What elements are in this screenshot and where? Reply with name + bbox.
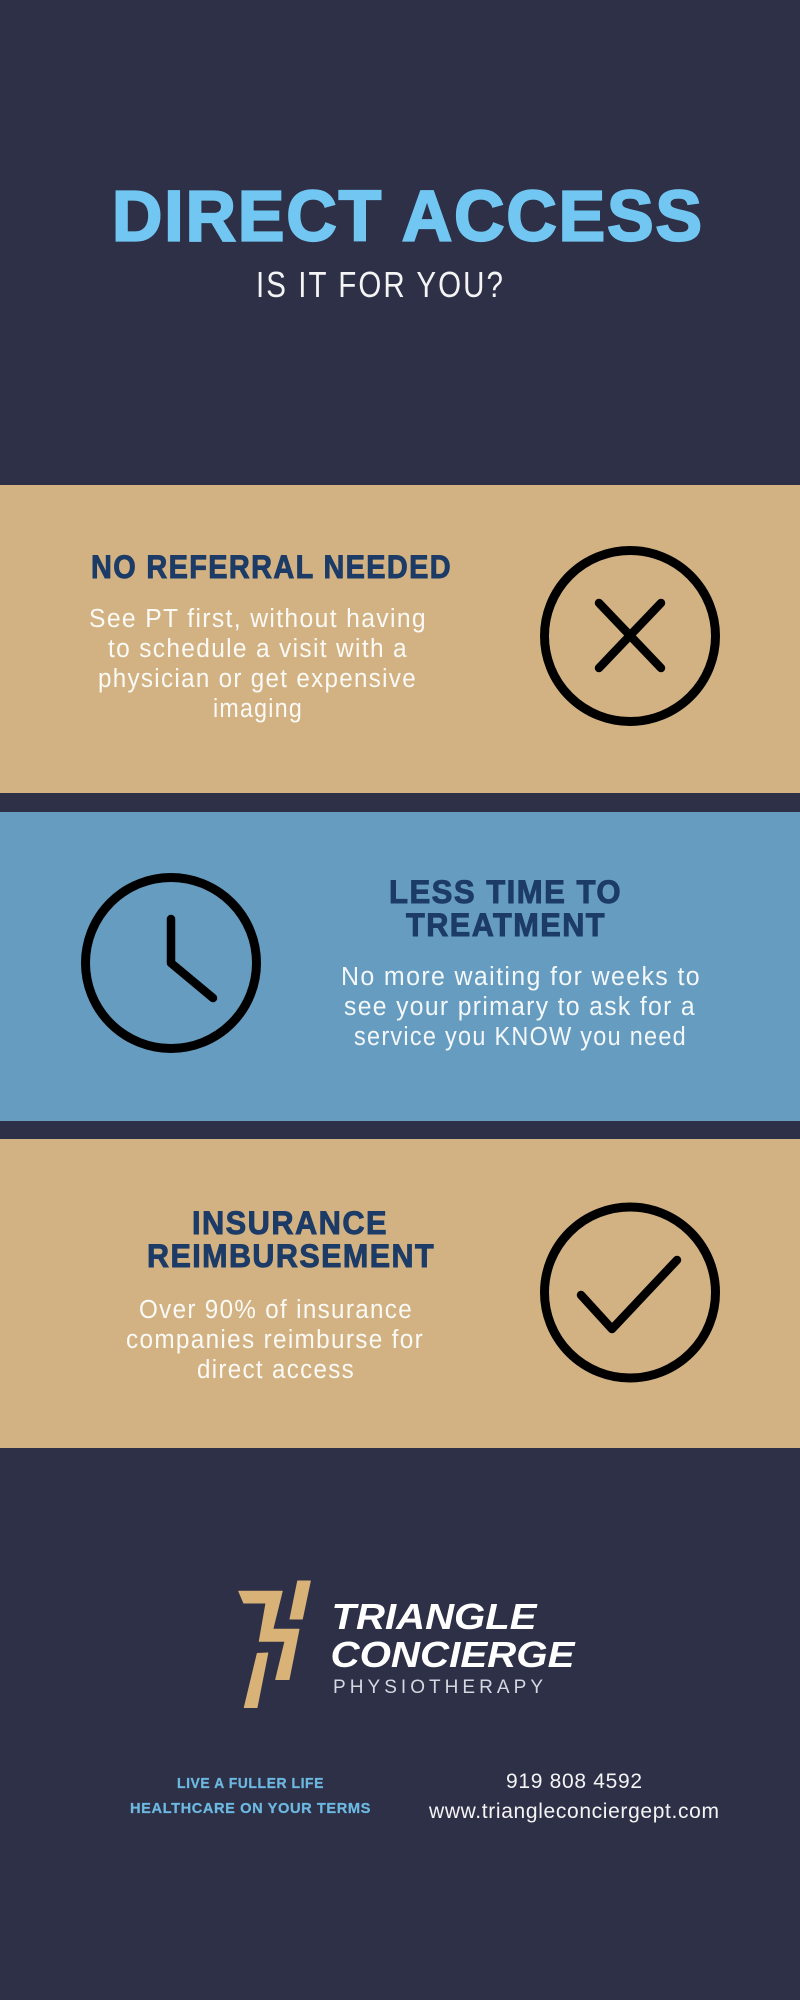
heading: insurance reimbursement: INSURANCE	[192, 1205, 388, 1241]
subtitle: IS IT FOR YOU?	[256, 264, 505, 305]
heading: insurance reimbursement	[147, 1205, 435, 1274]
panel: no referral needed	[0, 485, 800, 793]
text block: less time description: service you KNOW you need	[354, 1023, 687, 1051]
title: DIRECT ACCESS	[112, 178, 704, 256]
slogan: HEALTHCARE ON YOUR TERMS	[130, 1800, 371, 1817]
logo wordmark	[330, 1596, 576, 1675]
heading: less time to treatment: TREATMENT	[406, 907, 606, 943]
slogan: LIVE A FULLER LIFE	[177, 1775, 324, 1792]
panel background blue	[0, 812, 800, 1121]
panel: less time to treatment	[0, 812, 800, 1121]
text block: no referral description	[89, 605, 427, 723]
logo mark	[239, 1581, 310, 1708]
heading: less time to treatment: LESS TIME TO	[389, 874, 622, 910]
text block: no referral description: physician or get expensive	[98, 665, 417, 693]
icon: check mark in circle	[544, 1207, 716, 1378]
logo wordmark: TRIANGLE	[332, 1596, 538, 1637]
text block: insurance description: companies reimburse for	[126, 1326, 424, 1354]
text block: less time description: see your primary to ask for a	[344, 993, 696, 1021]
heading: less time to treatment	[389, 874, 622, 943]
logo tagline: PHYSIOTHERAPY	[333, 1677, 543, 1698]
text block: no referral description: imaging	[213, 695, 303, 723]
text block: insurance description: direct access	[197, 1356, 355, 1384]
text block: less time description: No more waiting for weeks to	[341, 963, 701, 991]
contact details	[428, 1770, 719, 1823]
panel background tan	[0, 1139, 800, 1448]
title block	[112, 178, 704, 305]
logo: triangle concierge physiotherapy	[239, 1581, 576, 1708]
icon: x in circle	[544, 550, 716, 722]
heading: insurance reimbursement: REIMBURSEMENT	[147, 1238, 435, 1274]
text block: no referral description: to schedule a visit with a	[108, 635, 408, 663]
contact details: www.triangleconciergept.com	[428, 1800, 719, 1823]
text block: less time description	[341, 963, 701, 1051]
heading: no referral needed: NO REFERRAL NEEDED	[91, 549, 452, 585]
logo wordmark: CONCIERGE	[330, 1634, 576, 1675]
text block: no referral description: See PT first, without having	[89, 605, 427, 633]
icon: clock	[86, 878, 256, 1048]
panel: insurance reimbursement	[0, 1139, 800, 1448]
slogan	[130, 1775, 371, 1817]
text block: insurance description	[126, 1296, 424, 1384]
panel background tan	[0, 485, 800, 793]
contact details: 919 808 4592	[506, 1770, 642, 1793]
text block: insurance description: Over 90% of insurance	[139, 1296, 413, 1324]
